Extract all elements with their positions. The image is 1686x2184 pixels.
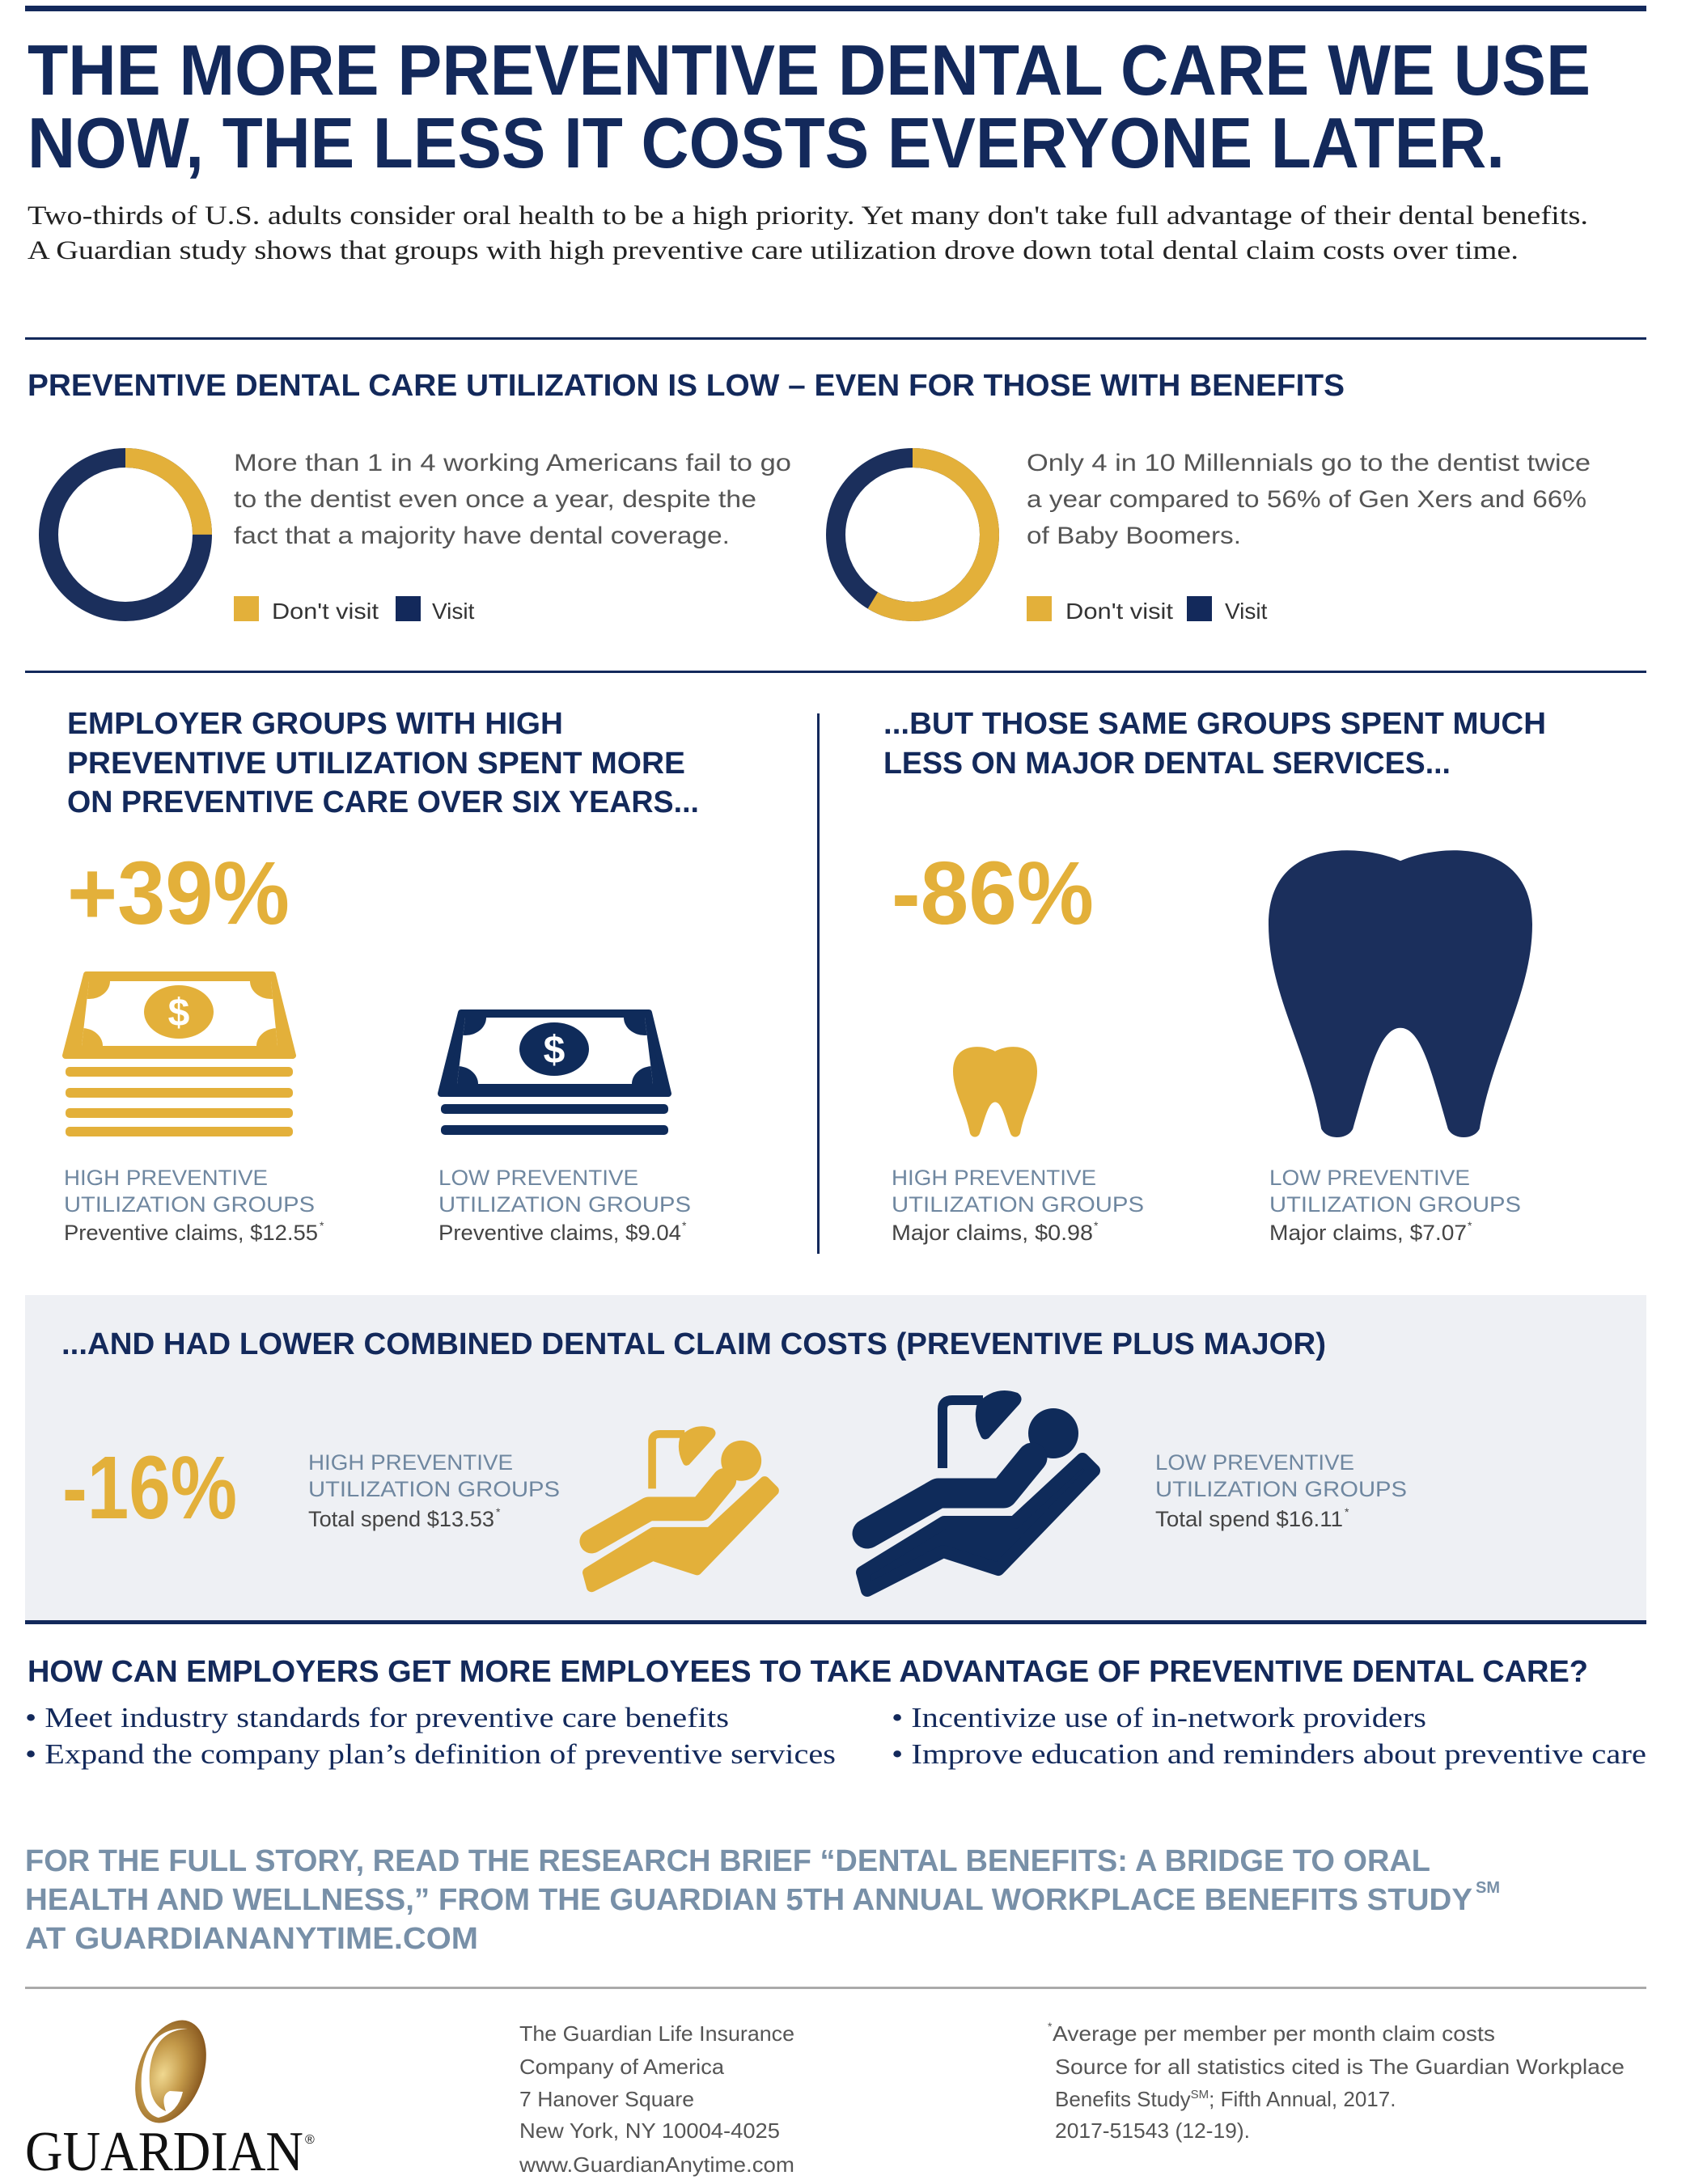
intro text: Two-thirds of U.S. adults consider oral health to be a high priority. Yet many don't take full advantage of their dental benefits. [28,201,1588,231]
heading right: LESS ON MAJOR DENTAL SERVICES... [883,747,1451,781]
section heading: utilization low: PREVENTIVE DENTAL CARE UTILIZATION IS LOW – EVEN FOR THOSE WITH BENEFITS [28,369,1345,403]
label: high preventive claims: UTILIZATION GROUPS [64,1192,315,1217]
label: low preventive claims: Preventive claims, $9.04 [438,1221,681,1245]
footnote: Average per member per month claim costs [1053,2021,1495,2046]
footnote [1048,2020,1625,2143]
label: low preventive claims: * [682,1219,687,1232]
address [519,2021,794,2177]
heading left: PREVENTIVE UTILIZATION SPENT MORE [67,747,685,781]
address: www.GuardianAnytime.com [519,2152,794,2177]
label: high preventive claims: * [320,1219,324,1232]
call to action: FOR THE FULL STORY, READ THE RESEARCH BRIEF “DENTAL BENEFITS: A BRIDGE TO ORAL [25,1844,1430,1878]
heading: how can employers: HOW CAN EMPLOYERS GET MORE EMPLOYEES TO TAKE ADVANTAGE OF PREVENTIVE DENTAL CARE? [28,1655,1588,1689]
footnote: ; Fifth Annual, 2017. [1209,2087,1396,2111]
bullet list: • Meet industry standards for preventive care benefits [25,1702,729,1733]
call to action: HEALTH AND WELLNESS,” FROM THE GUARDIAN 5TH ANNUAL WORKPLACE BENEFITS STUDY [25,1883,1472,1917]
label: low major claims: UTILIZATION GROUPS [1269,1192,1521,1217]
logo: Guardian: ® [305,2133,315,2147]
label: low major claims: LOW PREVENTIVE [1269,1166,1470,1190]
icon: yellow money stack [61,963,299,1136]
panel: preventive spend [61,707,699,1245]
text block 2: Only 4 in 10 Millennials go to the dentist twice [1027,450,1591,476]
intro text [28,201,1588,265]
text block 1 [234,450,791,549]
title: THE MORE PREVENTIVE DENTAL CARE WE USE [28,30,1591,110]
stat +39%: +39% [67,844,290,943]
address: Company of America [519,2055,725,2079]
call to action: SM [1476,1879,1500,1897]
legend 1: Don't visit [272,599,379,624]
icon: small yellow tooth [953,1047,1037,1137]
label: high major claims: UTILIZATION GROUPS [892,1192,1144,1217]
icon: large navy tooth [1269,850,1532,1137]
address: The Guardian Life Insurance [519,2021,794,2046]
footnote: 2017-51543 (12-19). [1055,2118,1250,2143]
heading combined: ...AND HAD LOWER COMBINED DENTAL CLAIM COSTS (PREVENTIVE PLUS MAJOR) [61,1327,1326,1361]
text block 2: a year compared to 56% of Gen Xers and 66% [1027,486,1586,513]
legend 2: Don't visit [1065,599,1173,624]
label: low major claims: Major claims, $7.07 [1269,1221,1467,1245]
legend 1: Visit [432,599,475,624]
text block 1: fact that a majority have dental coverage. [234,523,730,549]
donut chart 1 [49,458,202,612]
heading left: EMPLOYER GROUPS WITH HIGH [67,707,563,741]
label: high total: * [496,1505,501,1518]
heading right: ...BUT THOSE SAME GROUPS SPENT MUCH [883,707,1546,741]
label: high preventive claims: HIGH PREVENTIVE [64,1166,268,1190]
label: high total: Total spend $13.53 [308,1507,494,1531]
label: low total: LOW PREVENTIVE [1155,1450,1354,1475]
address: 7 Hanover Square [519,2087,694,2111]
bullet list [25,1702,1646,1770]
intro text: A Guardian study shows that groups with high preventive care utilization drove down total dental claim costs over time. [28,236,1519,265]
heading left: ON PREVENTIVE CARE OVER SIX YEARS... [67,785,699,819]
text block 1: More than 1 in 4 working Americans fail to go [234,450,791,476]
icon: navy money stack: $ [544,1029,566,1072]
text block 2 [1027,450,1591,549]
label: low total: Total spend $16.11 [1155,1507,1343,1531]
call to action: AT GUARDIANANYTIME.COM [25,1922,478,1956]
bullet list: • Improve education and reminders about preventive care [892,1738,1646,1770]
footnote: Source for all statistics cited is The Guardian Workplace [1055,2055,1625,2079]
call to action [25,1844,1500,1956]
text block 1: to the dentist even once a year, despite the [234,486,756,513]
icon: yellow dental chair [587,1426,773,1587]
icon: navy money stack [436,1000,674,1135]
label: low major claims: * [1468,1219,1472,1232]
label: high major claims: Major claims, $0.98 [892,1221,1093,1245]
bullet list: • Expand the company plan’s definition of preventive services [25,1738,836,1770]
label: high major claims [892,1166,1144,1245]
footnote: SM [1191,2088,1209,2101]
title [28,30,1591,183]
label: low total: UTILIZATION GROUPS [1155,1477,1407,1501]
label: low major claims [1269,1166,1521,1245]
stat -16%: -16% [62,1438,237,1538]
label: high preventive claims [64,1166,324,1245]
label: high preventive claims: Preventive claims, $12.55 [64,1221,318,1245]
footnote: * [1048,2020,1053,2033]
panel: major spend [883,707,1546,1245]
bullet list: • Incentivize use of in-network providers [892,1702,1426,1733]
label: high total [308,1450,560,1531]
legend 2 [1027,596,1268,624]
label: high major claims: * [1094,1219,1099,1232]
logo: Guardian [25,2010,315,2183]
label: low total [1155,1450,1407,1531]
heading left [67,707,699,819]
label: low preventive claims: UTILIZATION GROUPS [438,1192,691,1217]
heading right [883,707,1546,781]
logo: Guardian: GUARDIAN [25,2121,303,2183]
title: NOW, THE LESS IT COSTS EVERYONE LATER. [28,103,1505,183]
stat -86%: -86% [892,844,1094,943]
donut chart 2 [836,458,989,612]
label: high major claims: HIGH PREVENTIVE [892,1166,1096,1190]
label: high total: HIGH PREVENTIVE [308,1450,513,1475]
address: New York, NY 10004-4025 [519,2118,780,2143]
legend 1 [234,596,475,624]
label: high total: UTILIZATION GROUPS [308,1477,560,1501]
label: low total: * [1345,1505,1349,1518]
label: low preventive claims: LOW PREVENTIVE [438,1166,638,1190]
icon: yellow money stack: $ [168,992,190,1035]
footnote: Benefits Study [1055,2087,1191,2111]
legend 2: Visit [1225,599,1268,624]
label: low preventive claims [438,1166,691,1245]
icon: navy dental chair [862,1390,1094,1590]
panel: combined costs [25,1295,1646,1624]
text block 2: of Baby Boomers. [1027,523,1241,549]
